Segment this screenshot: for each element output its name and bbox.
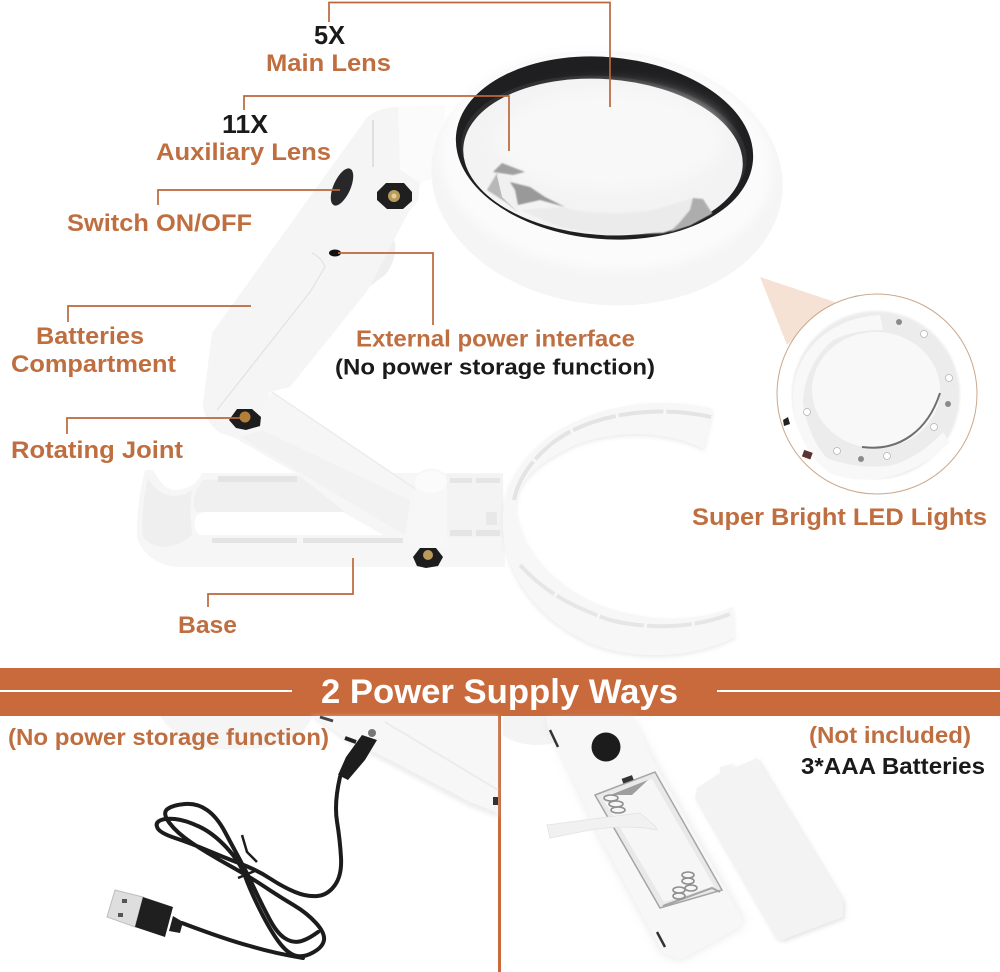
callout: external power interface: External power interface xyxy=(356,326,635,352)
lower arm xyxy=(233,392,420,540)
battery compartment xyxy=(595,772,722,908)
lens disc xyxy=(812,332,940,448)
pull ribbon xyxy=(547,813,657,838)
cable tie xyxy=(238,835,257,878)
caption: batteries: 3*AAA Batteries xyxy=(801,753,985,779)
ring screws xyxy=(858,319,951,462)
callout: batteries compartment: Compartment xyxy=(11,351,176,378)
caption: not included: (Not included) xyxy=(809,722,971,748)
callout: main lens: 5X xyxy=(314,20,346,50)
power port xyxy=(329,250,341,256)
main lens glass xyxy=(458,69,748,245)
lens housing xyxy=(421,36,793,320)
power supply banner: 2 Power Supply Ways xyxy=(321,673,678,711)
callout: batteries compartment xyxy=(11,306,251,378)
panel: USB power xyxy=(8,716,498,958)
base ring xyxy=(503,403,735,657)
LED caption: Super Bright LED Lights xyxy=(692,504,987,531)
callout: main lens xyxy=(266,2,610,107)
callout: switch: Switch ON/OFF xyxy=(67,210,252,237)
springs xyxy=(604,795,697,899)
stand behind upper arm xyxy=(365,232,395,290)
caption: (No power storage function) xyxy=(8,724,329,750)
callout: external power interface xyxy=(335,253,655,380)
switch button xyxy=(326,165,358,209)
inset circle xyxy=(777,294,977,494)
USB plug xyxy=(107,890,183,937)
switch port xyxy=(802,450,813,459)
LED inset xyxy=(692,277,987,531)
callout: external power interface: (No power storage function) xyxy=(335,354,655,380)
rotating joint screw xyxy=(229,409,261,430)
callout: batteries compartment: Batteries xyxy=(36,323,144,350)
callout: main lens: Main Lens xyxy=(266,50,391,77)
callout: auxiliary lens xyxy=(156,96,509,166)
white bracket xyxy=(793,315,950,480)
DC plug xyxy=(338,729,377,780)
callout: rotating joint xyxy=(11,418,240,464)
power button xyxy=(592,732,620,762)
magnifier product illustration xyxy=(137,36,793,657)
LED ring xyxy=(783,311,960,480)
USB cable xyxy=(157,777,341,958)
base frame xyxy=(137,470,505,567)
callout: base xyxy=(178,558,353,639)
base joint screw xyxy=(413,548,443,568)
callout: auxiliary lens: Auxiliary Lens xyxy=(156,139,331,166)
callout: base: Base xyxy=(178,612,237,639)
LED dots xyxy=(804,330,952,460)
callout: switch xyxy=(67,190,340,237)
power supply banner xyxy=(0,668,1000,716)
callout: rotating joint: Rotating Joint xyxy=(11,437,183,464)
device fragment xyxy=(160,716,498,817)
hinge cylinder xyxy=(415,468,447,547)
battery cover xyxy=(695,758,845,942)
divider between panels xyxy=(498,716,501,972)
upper arm xyxy=(203,105,445,437)
black lens ring xyxy=(448,44,761,252)
inset pointer xyxy=(760,277,835,345)
top joint screw xyxy=(377,183,412,209)
callout: auxiliary lens: 11X xyxy=(222,109,269,139)
device fragment xyxy=(503,716,743,960)
panel: battery power xyxy=(503,716,985,960)
